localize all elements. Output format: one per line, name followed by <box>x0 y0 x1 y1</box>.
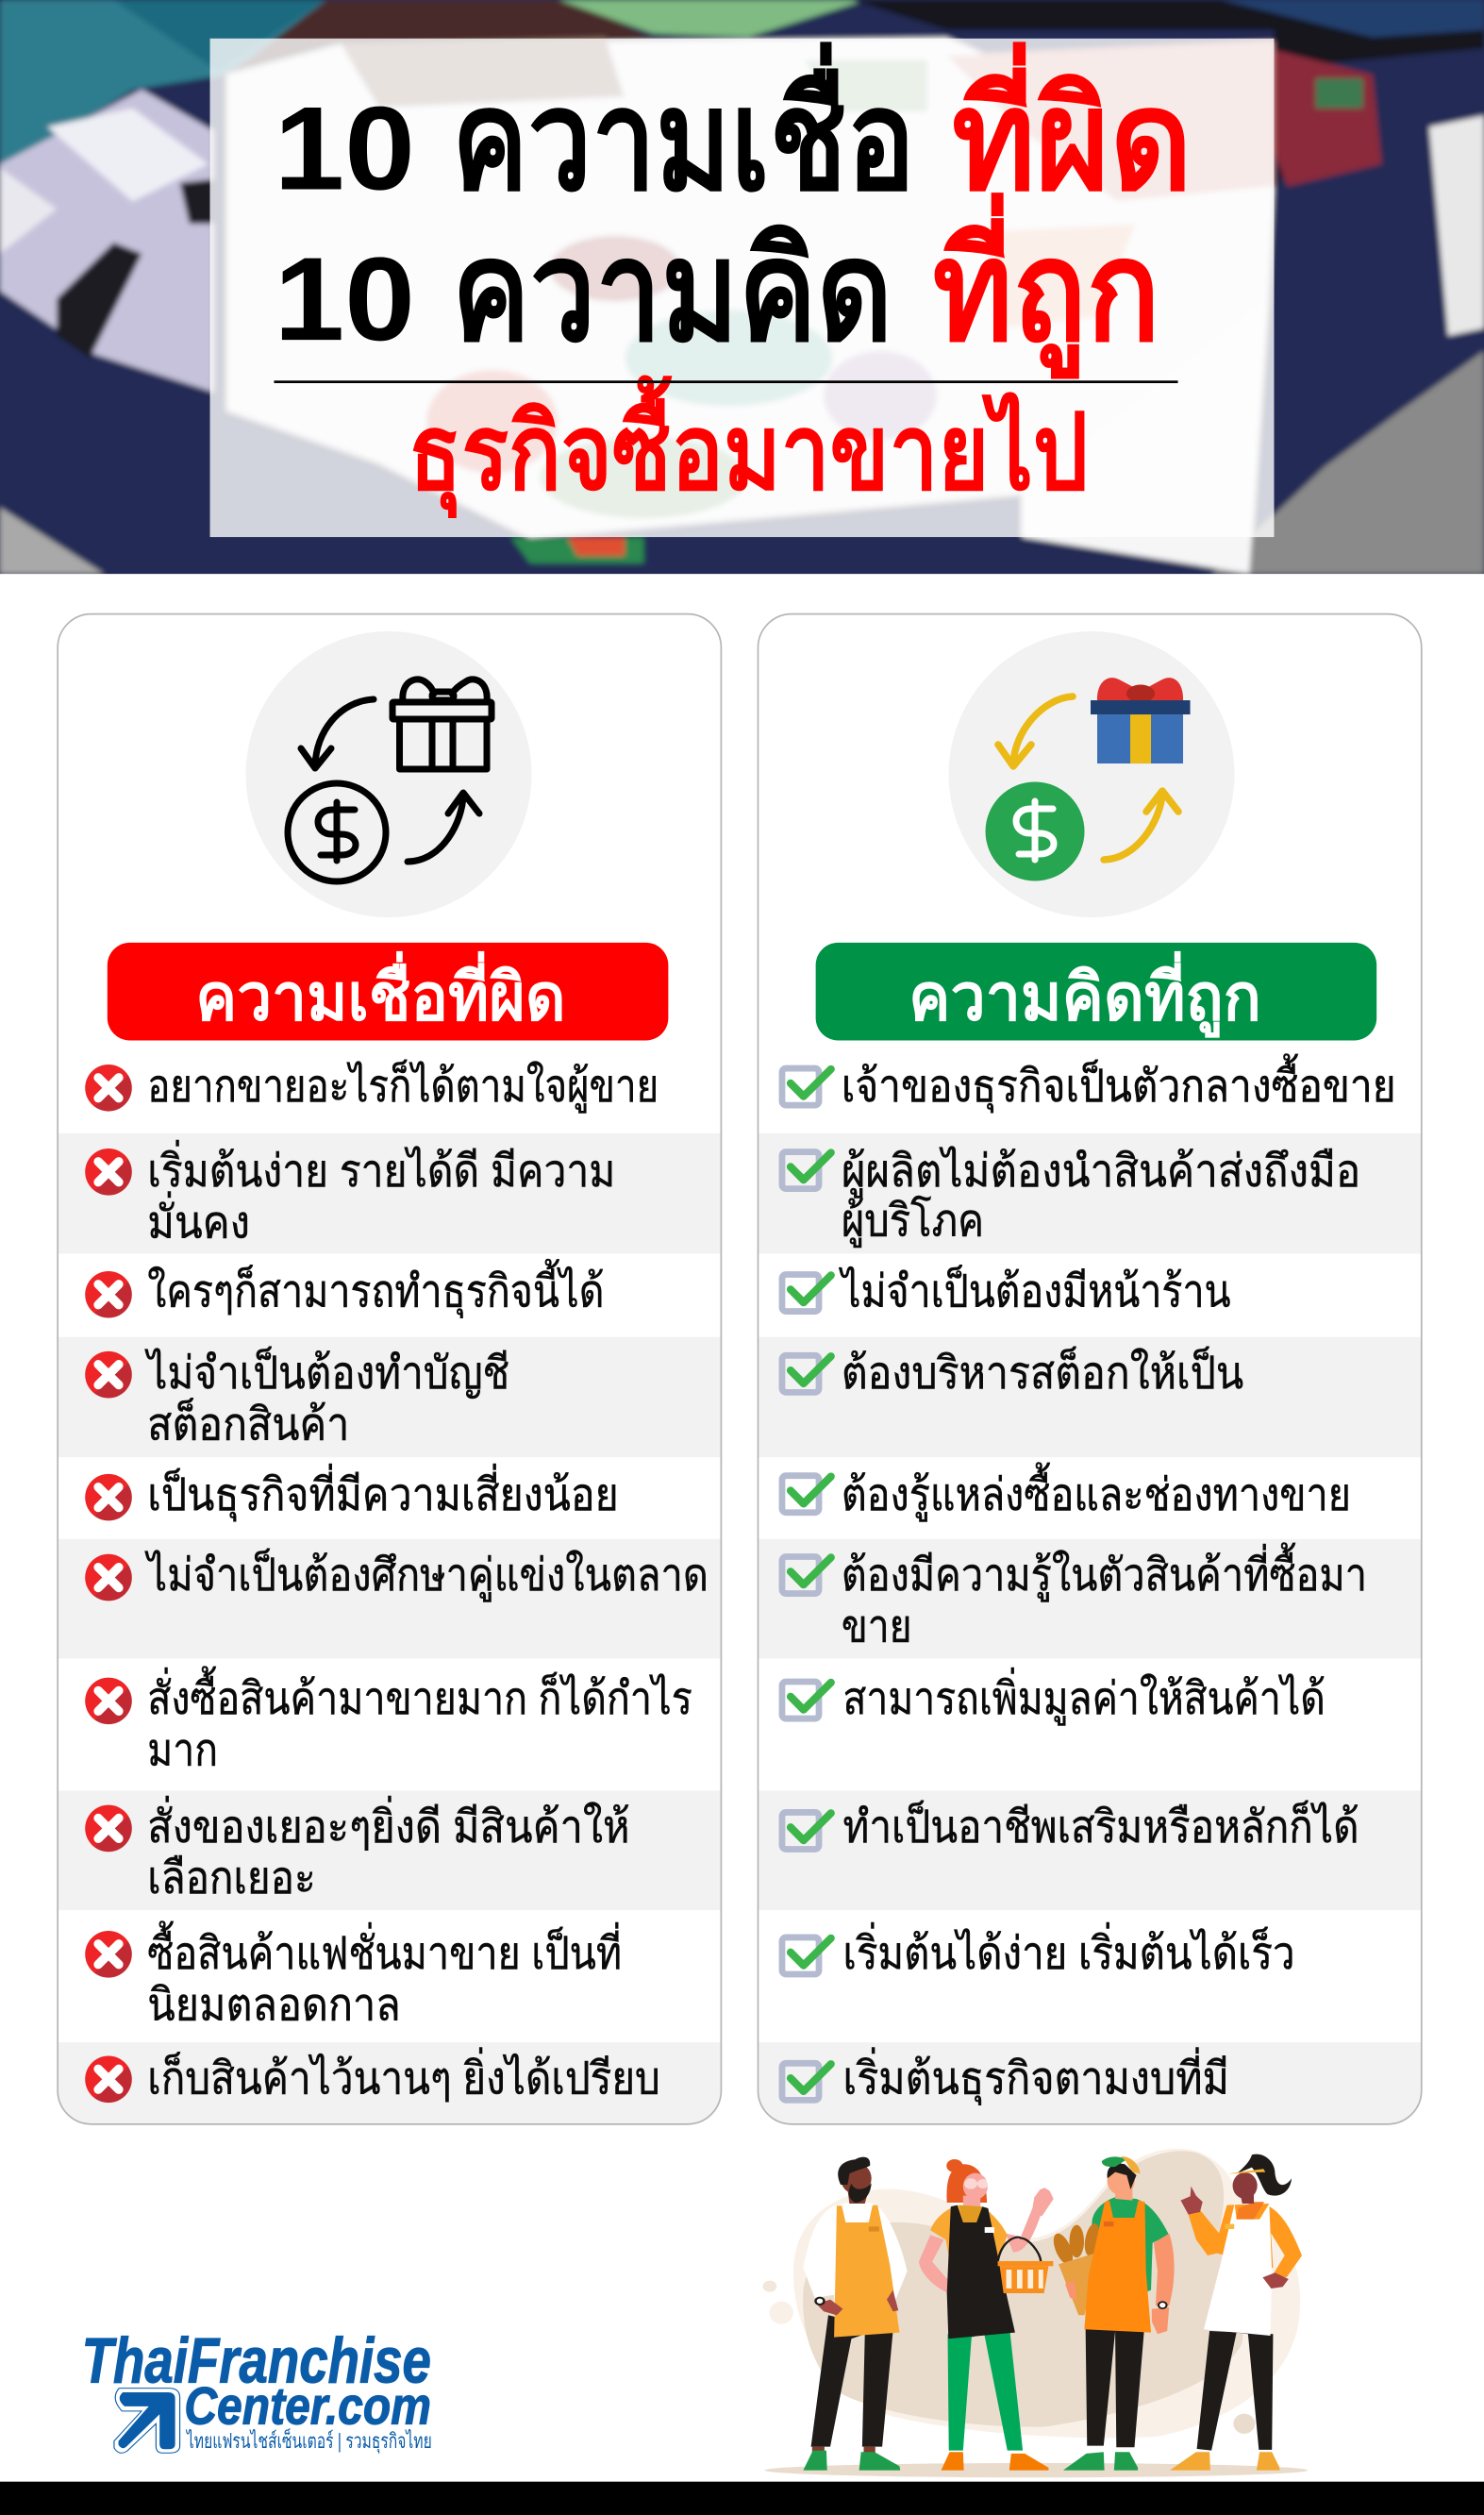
heading: wrong beliefs: ความเชื่อที่ผิด <box>195 950 566 1033</box>
item 5: ต้องรู้แหล่งซื้อและช่องทางขาย <box>842 1462 1351 1522</box>
item 4: ต้องบริหารสต็อกให้เป็น <box>842 1346 1243 1399</box>
backdrop blobs <box>763 2149 1308 2477</box>
title line 2 words: ความคิด <box>452 212 892 370</box>
item 8: เลือกเยอะ <box>147 1853 316 1903</box>
heading: right ideas: ความคิดที่ถูก <box>909 950 1261 1038</box>
person: woman with basket <box>919 2159 1054 2471</box>
item 5: เป็นธุรกิจที่มีความเสี่ยงน้อย <box>147 1464 619 1522</box>
item 9 <box>85 1920 622 2030</box>
logo: ThaiFranchise Center.com <box>82 2324 432 2454</box>
item 8 <box>85 1796 630 1903</box>
item 9: ซื้อสินค้าแฟชั่นมาขาย เป็นที่ <box>147 1920 622 1979</box>
item 4 <box>85 1346 509 1450</box>
item 9: เริ่มต้นได้ง่าย เริ่มต้นได้เร็ว <box>843 1922 1295 1979</box>
person: woman in visor <box>1170 2155 1302 2471</box>
heading: wrong beliefs <box>108 943 668 1040</box>
item 10: เก็บสินค้าไว้นานๆ ยิ่งได้เปรียบ <box>147 2048 660 2104</box>
item 7: สั่งซื้อสินค้ามาขายมาก ก็ได้กำไร <box>147 1666 692 1724</box>
item 2: ผู้บริโภค <box>842 1196 984 1249</box>
item 5 <box>782 1462 1351 1522</box>
panel: wrong beliefs <box>58 614 721 2126</box>
item 4: ไม่จำเป็นต้องทำบัญชี <box>144 1346 509 1399</box>
title line 1 number: 10 <box>274 81 415 214</box>
logo arrow <box>114 2389 180 2453</box>
item 1: เจ้าของธุรกิจเป็นตัวกลางซื้อขาย <box>842 1053 1396 1114</box>
background photo: market stall with socks <box>0 0 1484 590</box>
item 3: ไม่จำเป็นต้องมีหน้าร้าน <box>838 1264 1231 1316</box>
item 2: เริ่มต้นง่าย รายได้ดี มีความ <box>147 1140 615 1197</box>
item 2: ผู้ผลิตไม่ต้องนำสินค้าส่งถึงมือ <box>842 1146 1360 1199</box>
item 9: นิยมตลอดกาล <box>147 1980 401 2030</box>
item 7 <box>85 1666 692 1775</box>
item 6: ไม่จำเป็นต้องศึกษาคู่แข่งในตลาด <box>144 1548 709 1602</box>
item 2 <box>782 1146 1360 1249</box>
item 6 <box>782 1542 1367 1652</box>
item 8: ทำเป็นอาชีพเสริมหรือหลักก็ได้ <box>843 1800 1359 1853</box>
illustration: four shop staff <box>763 2149 1308 2477</box>
logo line 2: Center.com <box>184 2376 431 2436</box>
item 2 <box>85 1140 615 1248</box>
title line 1 words: ความเชื่อ <box>452 42 915 219</box>
item 10 <box>782 2048 1229 2106</box>
heading: right ideas <box>816 943 1376 1040</box>
footer bar <box>0 2482 1484 2515</box>
person: man with bread <box>1050 2156 1175 2471</box>
item 1 <box>782 1053 1396 1114</box>
logo line 1: ThaiFranchise <box>82 2324 431 2396</box>
item 1: อยากขายอะไรก็ได้ตามใจผู้ขาย <box>147 1059 659 1114</box>
title line 2 red: ที่ถูก <box>933 193 1160 379</box>
item 3 <box>85 1258 604 1318</box>
item 3: ใครๆก็สามารถทำธุรกิจนี้ได้ <box>147 1258 604 1318</box>
person: bearded man <box>803 2157 908 2471</box>
item 2: มั่นคง <box>147 1191 250 1248</box>
title line 1 red: ที่ผิด <box>952 42 1192 219</box>
subtitle: ธุรกิจซื้อมาขายไป <box>409 375 1088 519</box>
item 8: สั่งของเยอะๆยิ่งดี มีสินค้าให้ <box>147 1796 630 1853</box>
item 7: สามารถเพิ่มมูลค่าให้สินค้าได้ <box>843 1668 1326 1726</box>
item 5 <box>85 1464 619 1522</box>
title line 2 number: 10 <box>274 232 415 365</box>
title panel <box>210 39 1274 537</box>
item 10: เริ่มต้นธุรกิจตามงบที่มี <box>843 2048 1229 2106</box>
item 7: มาก <box>147 1725 218 1775</box>
icon: coloured gift and coin cycle <box>949 631 1235 917</box>
item 6: ขาย <box>842 1602 912 1652</box>
item 4: สต็อกสินค้า <box>147 1397 349 1450</box>
logo tagline: ไทยแฟรนไชส์เซ็นเตอร์ | รวมธุรกิจไทย <box>185 2427 432 2454</box>
item 7 <box>782 1668 1326 1726</box>
panel: right ideas <box>758 614 1422 2126</box>
icon: black gift and coin cycle <box>246 631 532 917</box>
item 6: ต้องมีความรู้ในตัวสินค้าที่ซื้อมา <box>842 1542 1367 1602</box>
